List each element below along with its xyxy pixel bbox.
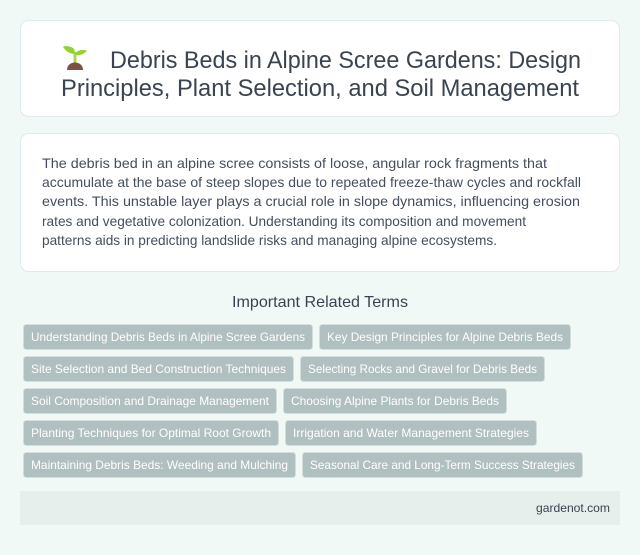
footer: gardenot.com xyxy=(536,501,610,515)
tag xyxy=(24,388,276,414)
panel: title card xyxy=(20,20,620,116)
text block: description: accumulate at the base of steep slopes due to repeated freeze-thaw cycles and rockfall xyxy=(42,174,581,190)
tag xyxy=(284,388,506,414)
tag xyxy=(286,420,536,446)
tag xyxy=(24,452,296,478)
title xyxy=(61,47,581,102)
text block: description: The debris bed in an alpine scree consists of loose, angular rock fragments that xyxy=(42,155,547,171)
text block: description xyxy=(42,155,581,248)
tag xyxy=(24,420,278,446)
tag: Key Design Principles for Alpine Debris Beds xyxy=(327,330,563,344)
tag: Site Selection and Bed Construction Techniques xyxy=(31,362,286,376)
tag xyxy=(320,324,570,350)
footer xyxy=(20,491,620,525)
icon: seedling xyxy=(63,46,87,70)
tag xyxy=(24,324,312,350)
title: Debris Beds in Alpine Scree Gardens: Design xyxy=(110,47,581,74)
text block: description: events. This unstable layer plays a crucial role in slope dynamics, influencing erosion xyxy=(42,193,580,209)
tag: Irrigation and Water Management Strategies xyxy=(293,426,529,440)
tag xyxy=(302,452,582,478)
title: Principles, Plant Selection, and Soil Management xyxy=(61,75,579,102)
tag: Seasonal Care and Long-Term Success Strategies xyxy=(310,458,575,472)
panel: related term tags xyxy=(24,324,582,478)
tag: Understanding Debris Beds in Alpine Scree Gardens xyxy=(31,330,305,344)
tag xyxy=(24,356,294,382)
tag: Maintaining Debris Beds: Weeding and Mulching xyxy=(31,458,288,472)
tag: Soil Composition and Drainage Management xyxy=(31,394,270,408)
tag: Selecting Rocks and Gravel for Debris Beds xyxy=(308,362,537,376)
text block: description: rates and vegetative colonization. Understanding its composition and movement xyxy=(42,213,526,229)
tag xyxy=(300,356,544,382)
tag: Planting Techniques for Optimal Root Growth xyxy=(31,426,271,440)
text block: description: patterns aids in predicting landslide risks and managing alpine ecosystems. xyxy=(42,232,497,248)
tag: Choosing Alpine Plants for Debris Beds xyxy=(291,394,499,408)
panel: description card xyxy=(20,134,620,272)
heading: related terms: Important Related Terms xyxy=(232,294,408,311)
